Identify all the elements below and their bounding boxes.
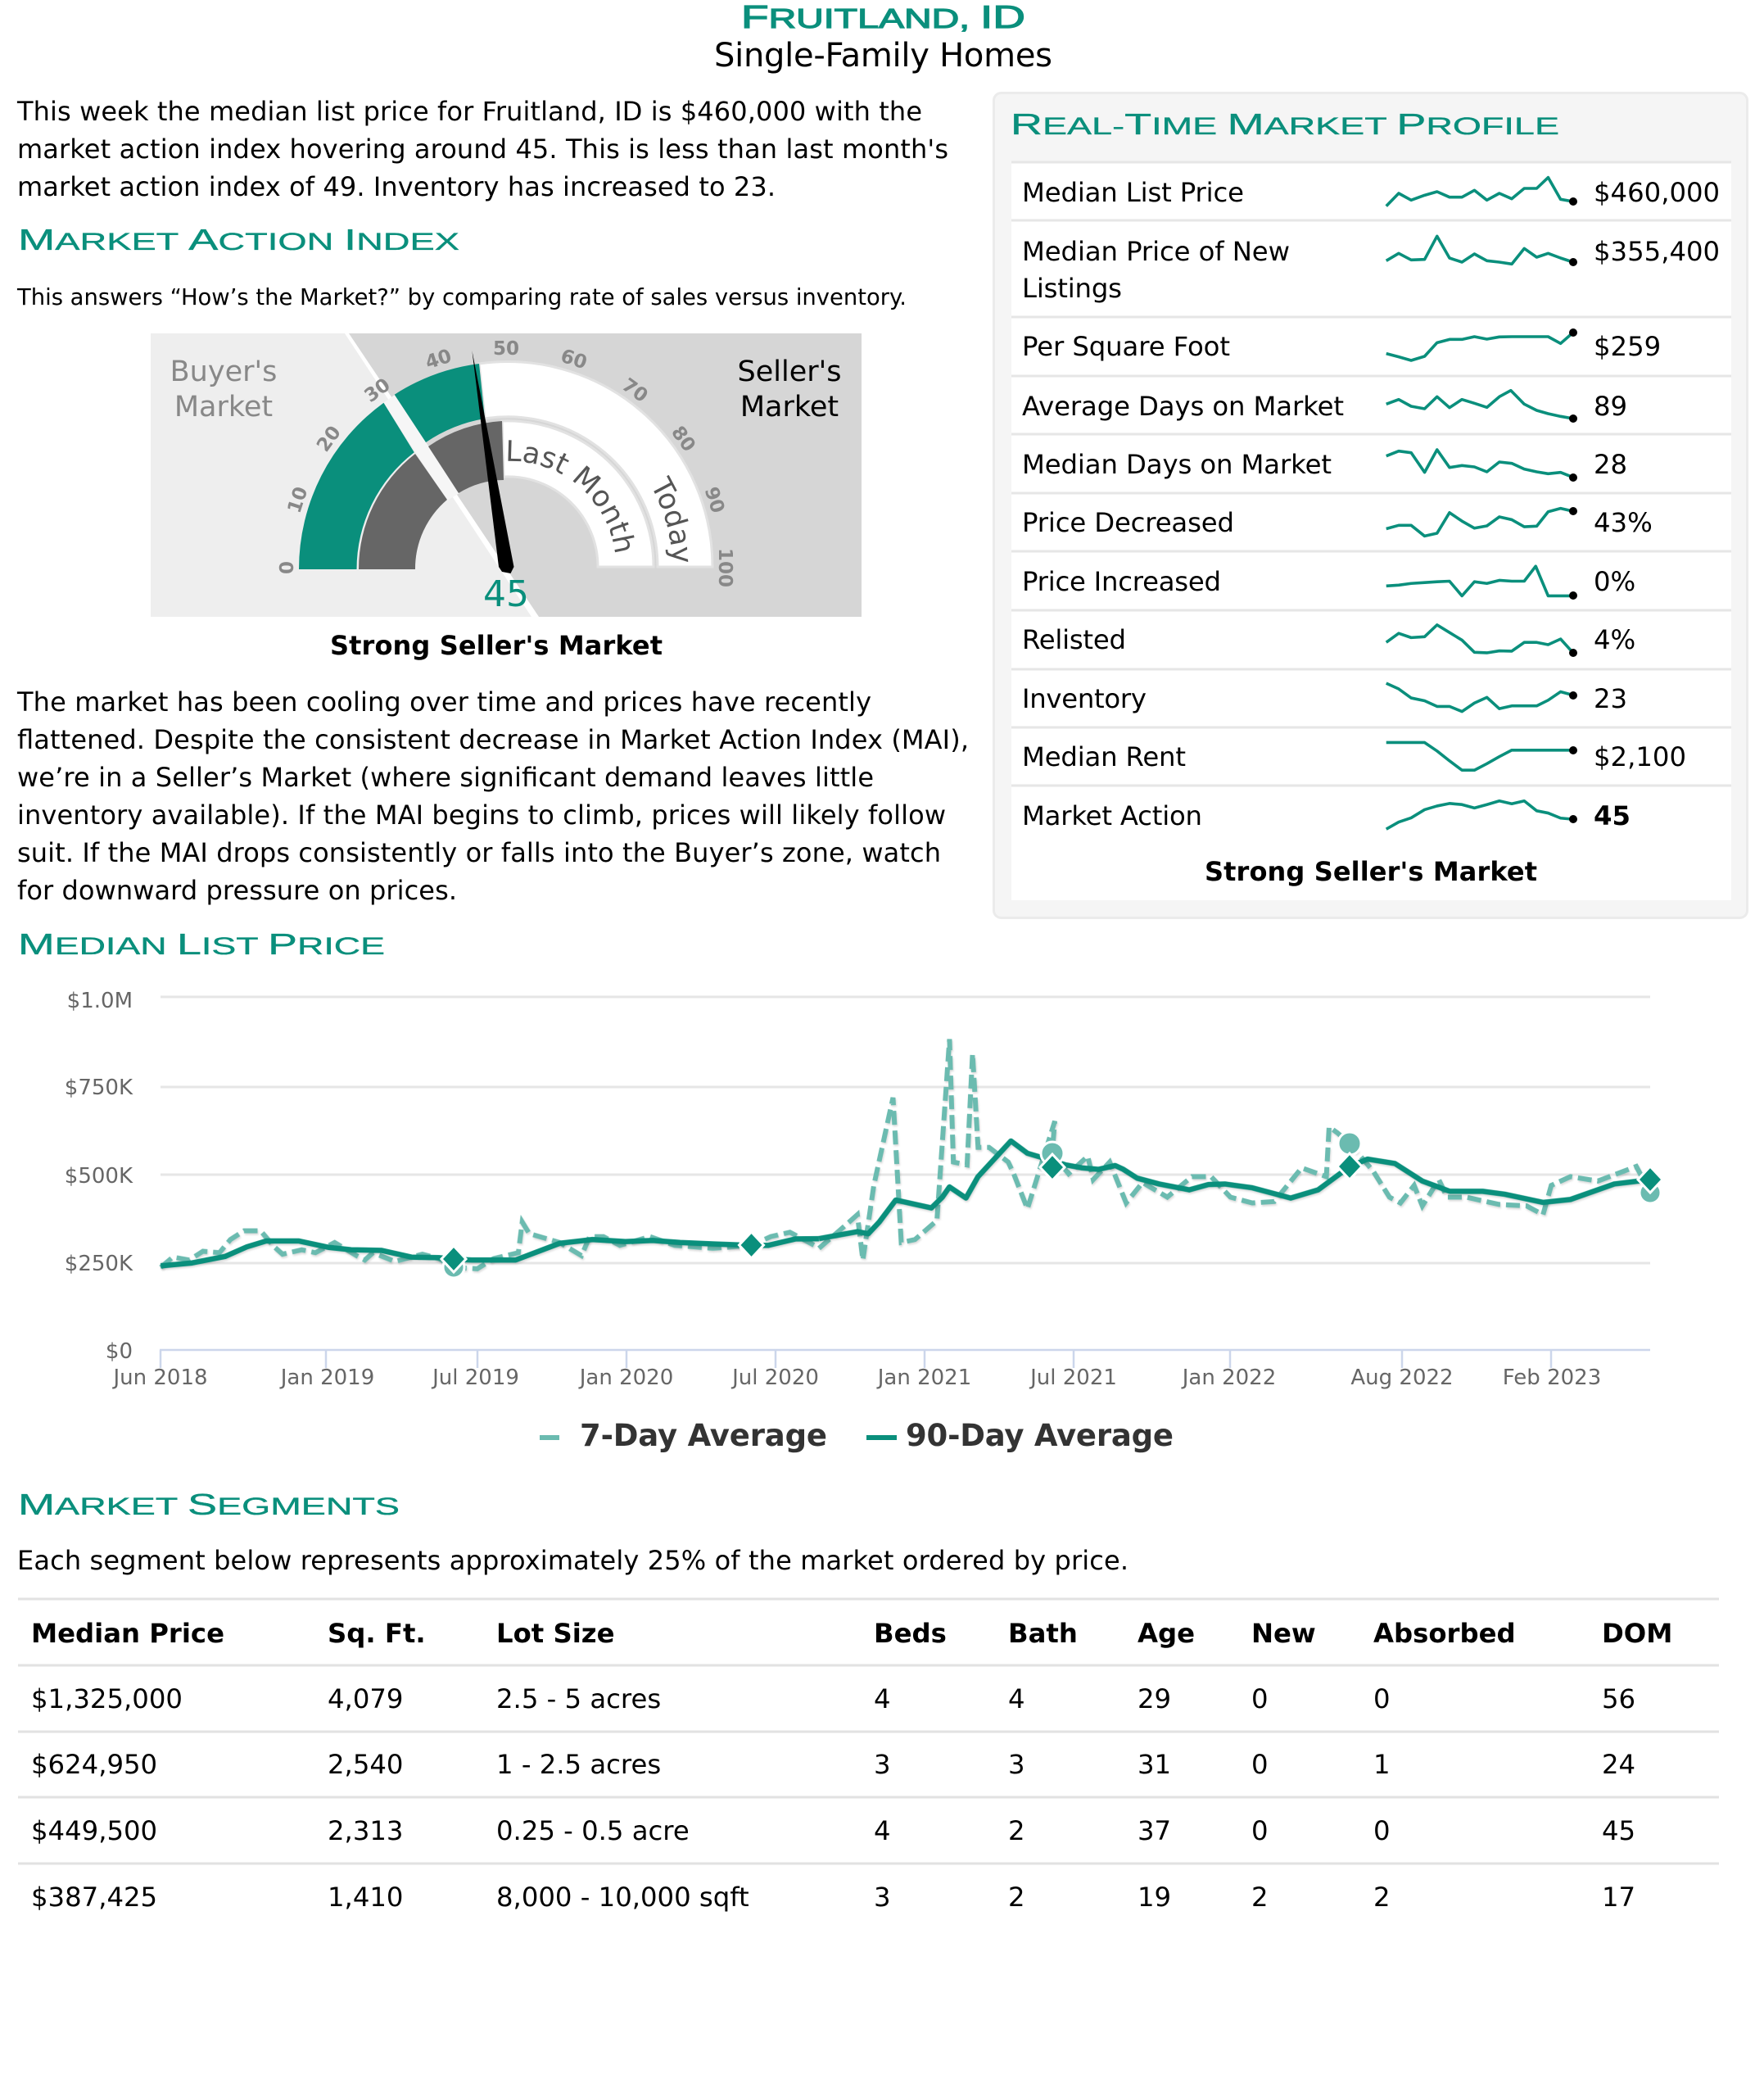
line chart: median list price: [65, 989, 1662, 1390]
row labels: Median List Price: [1022, 177, 1244, 208]
table row 2: 3: [874, 1749, 891, 1780]
table row 1: 4,079: [328, 1683, 403, 1714]
row values: $460,000: [1594, 177, 1720, 208]
table row 2: 3: [1008, 1749, 1025, 1780]
table row 1: 4: [874, 1683, 891, 1714]
table header: Absorbed: [1373, 1618, 1516, 1649]
row values: $259: [1594, 331, 1661, 362]
series: 90-day average: [161, 1141, 1650, 1266]
row values: 43%: [1594, 507, 1653, 538]
gauge: teal today segments: [299, 364, 485, 569]
gauge: scale labels: [277, 338, 735, 587]
table row 4: 2: [1251, 1882, 1269, 1913]
table row 2: 1: [1373, 1749, 1391, 1780]
row values: 89: [1594, 391, 1627, 422]
gauge: scale labels: 70: [617, 374, 652, 407]
table row 2: 1 - 2.5 acres: [496, 1749, 661, 1780]
gauge: scale labels: 10: [284, 484, 312, 516]
x axis labels: Aug 2022: [1350, 1366, 1454, 1390]
series: 7-day average: [161, 1039, 1650, 1269]
table row 1: 29: [1138, 1683, 1171, 1714]
gauge: last month label: Last Month: [508, 440, 634, 552]
gauge: seller's market label: [738, 356, 841, 423]
row labels: [1022, 177, 1344, 831]
x axis labels: Jun 2018: [111, 1366, 208, 1390]
table row 3: 0.25 - 0.5 acre: [496, 1815, 690, 1846]
sparkline end dots: [1569, 197, 1577, 823]
gauge: buyer's market label: Buyer's: [170, 356, 277, 388]
table header: [31, 1618, 1672, 1649]
gauge: today label: Today: [654, 475, 689, 562]
analysis text block: we’re in a Seller’s Market (where significant demand leaves little: [17, 762, 874, 793]
gauge: market action index: [151, 333, 862, 617]
row labels: Median Days on Market: [1022, 449, 1332, 480]
row labels: Average Days on Market: [1022, 391, 1344, 422]
text: market action index explanation: This answers “How’s the Market?” by comparing rate of sales versus inventory.: [16, 285, 907, 310]
x axis labels: Jan 2022: [1181, 1366, 1276, 1390]
row labels: Inventory: [1022, 683, 1147, 714]
row values: [1594, 177, 1720, 831]
table row 4: $387,425: [31, 1882, 157, 1913]
row labels: Relisted: [1022, 624, 1126, 655]
table header: Median Price: [31, 1618, 224, 1649]
table header: Age: [1138, 1618, 1195, 1649]
table row 4: 19: [1138, 1882, 1171, 1913]
y axis labels: $1.0M: [67, 989, 133, 1013]
table row 3: 2: [1008, 1815, 1025, 1846]
gauge caption: Strong Seller's Market: [330, 630, 663, 661]
panel caption: Strong Seller's Market: [1205, 856, 1537, 887]
analysis text block: flattened. Despite the consistent decrease in Market Action Index (MAI),: [17, 724, 969, 755]
90-day markers: [441, 1153, 1662, 1272]
chart legend: 90-Day Average: [906, 1418, 1174, 1453]
intro text block: This week the median list price for Fruitland, ID is $460,000 with the: [16, 96, 922, 127]
chart legend: 7-Day Average: [580, 1418, 827, 1453]
gauge: scale labels: 0: [277, 561, 298, 574]
table row 4: 1,410: [328, 1882, 403, 1913]
gauge: scale labels: 80: [667, 422, 699, 456]
title: [714, 0, 1052, 75]
table header: Bath: [1008, 1618, 1078, 1649]
row labels: Price Decreased: [1022, 507, 1234, 538]
x axis labels: Jan 2021: [876, 1366, 971, 1390]
row values: $2,100: [1594, 741, 1686, 772]
row values: 4%: [1594, 624, 1635, 655]
table row 2: [31, 1749, 1635, 1780]
analysis text block: The market has been cooling over time and prices have recently: [16, 686, 871, 718]
table row 4: 2: [1008, 1882, 1025, 1913]
row labels: Market Action: [1022, 800, 1202, 831]
gauge: scale labels: 20: [313, 422, 346, 456]
table row 1: 2.5 - 5 acres: [496, 1683, 661, 1714]
table row 2: 0: [1251, 1749, 1269, 1780]
table row 3: $449,500: [31, 1815, 157, 1846]
text: market segments explanation: Each segment below represents approximately 25% of the market ordered by price.: [17, 1545, 1129, 1576]
gauge: value: 45: [483, 573, 529, 615]
7-day markers: [443, 1132, 1661, 1278]
table row 4: 2: [1373, 1882, 1391, 1913]
table row 4: 3: [874, 1882, 891, 1913]
gauge: scale labels: 30: [360, 374, 395, 407]
table row 3: 0: [1251, 1815, 1269, 1846]
table header: New: [1251, 1618, 1316, 1649]
gauge: grey last month segments: [359, 421, 504, 569]
table row 2: $624,950: [31, 1749, 157, 1780]
table row 1: [31, 1683, 1635, 1714]
analysis text block: [16, 686, 969, 906]
x axis labels: [111, 1366, 1601, 1390]
row values: $355,400: [1594, 236, 1720, 267]
y axis labels: $750K: [65, 1076, 133, 1100]
title: F RUITLAND, ID: [741, 0, 1025, 35]
table row 3: 37: [1138, 1815, 1171, 1846]
table row 1: $1,325,000: [31, 1683, 183, 1714]
table row 3: 2,313: [328, 1815, 403, 1846]
row labels: Median Rent: [1022, 741, 1186, 772]
gauge: last month ring: [502, 421, 654, 567]
x axis labels: Jan 2020: [578, 1366, 673, 1390]
row labels: Listings: [1022, 273, 1122, 304]
y axis labels: $250K: [65, 1252, 133, 1276]
analysis text block: suit. If the MAI drops consistently or falls into the Buyer’s zone, watch: [17, 837, 941, 868]
gauge: scale labels: 60: [558, 346, 590, 374]
row labels: Price Increased: [1022, 566, 1221, 597]
table row 1: 56: [1602, 1683, 1635, 1714]
table row 1: 4: [1008, 1683, 1025, 1714]
gauge: buyer's market label: [170, 356, 277, 423]
y axis labels: $0: [106, 1339, 133, 1364]
x axis labels: Feb 2023: [1503, 1366, 1601, 1390]
table header: Sq. Ft.: [328, 1618, 426, 1649]
x axis labels: Jul 2019: [431, 1366, 519, 1390]
chart legend: [540, 1418, 1174, 1453]
gauge: scale labels: 50: [493, 338, 519, 360]
table row 2: 2,540: [328, 1749, 403, 1780]
table row 2: 31: [1138, 1749, 1171, 1780]
table row 1: 0: [1373, 1683, 1391, 1714]
heading: market segments: M ARKET S EGMENTS: [18, 1488, 400, 1521]
row labels: Per Square Foot: [1022, 331, 1230, 362]
panel heading: R EAL- T IME M ARKET P ROFILE: [1011, 107, 1559, 141]
x axis: [160, 1350, 1650, 1368]
y axis labels: [65, 989, 133, 1364]
row values: 45: [1594, 800, 1631, 831]
gauge: scale labels: 100: [714, 548, 735, 587]
gauge: today ring: [479, 362, 712, 567]
analysis text block: for downward pressure on prices.: [17, 875, 457, 906]
y axis labels: $500K: [65, 1164, 133, 1189]
title: Single-Family Homes: [714, 37, 1052, 75]
table row 3: 0: [1373, 1815, 1391, 1846]
table row 1: 0: [1251, 1683, 1269, 1714]
table row 4: 17: [1602, 1882, 1635, 1913]
gauge: buyer's market label: Market: [174, 391, 273, 423]
x axis labels: Jan 2019: [279, 1366, 374, 1390]
x axis labels: Jul 2021: [1029, 1366, 1117, 1390]
gauge: scale labels: 40: [423, 346, 455, 374]
table row 3: [31, 1815, 1635, 1846]
gauge: seller's market label: Seller's: [738, 356, 841, 388]
intro text block: market action index of 49. Inventory has increased to 23.: [17, 171, 776, 202]
table header: Beds: [874, 1618, 947, 1649]
intro text block: market action index hovering around 45. This is less than last month's: [17, 134, 948, 165]
sparklines upper: [1386, 178, 1573, 478]
table header: DOM: [1602, 1618, 1672, 1649]
table header: Lot Size: [496, 1618, 614, 1649]
gauge: seller's market label: Market: [740, 391, 839, 423]
heading: median list price: M EDIAN L IST P RICE: [18, 927, 385, 961]
table row 3: 45: [1602, 1815, 1635, 1846]
row labels: Median Price of New: [1022, 236, 1290, 267]
gauge: scale labels: 90: [700, 484, 728, 516]
sparklines lower: [1386, 509, 1573, 829]
table row 4: 8,000 - 10,000 sqft: [496, 1882, 749, 1913]
row values: 23: [1594, 683, 1627, 714]
analysis text block: inventory available). If the MAI begins to climb, prices will likely follow: [17, 799, 946, 831]
table row 4: [31, 1882, 1635, 1913]
row values: 0%: [1594, 566, 1635, 597]
gauge: needle: [472, 351, 514, 573]
table row 3: 4: [874, 1815, 891, 1846]
row values: 28: [1594, 449, 1627, 480]
intro text block: [16, 96, 948, 202]
heading: market action index: M ARKET A CTION INDEX: [18, 223, 459, 256]
table: market segments: [18, 1599, 1719, 1913]
panel: real-time market profile: [994, 93, 1748, 917]
x axis labels: Jul 2020: [730, 1366, 819, 1390]
table row 2: 24: [1602, 1749, 1635, 1780]
